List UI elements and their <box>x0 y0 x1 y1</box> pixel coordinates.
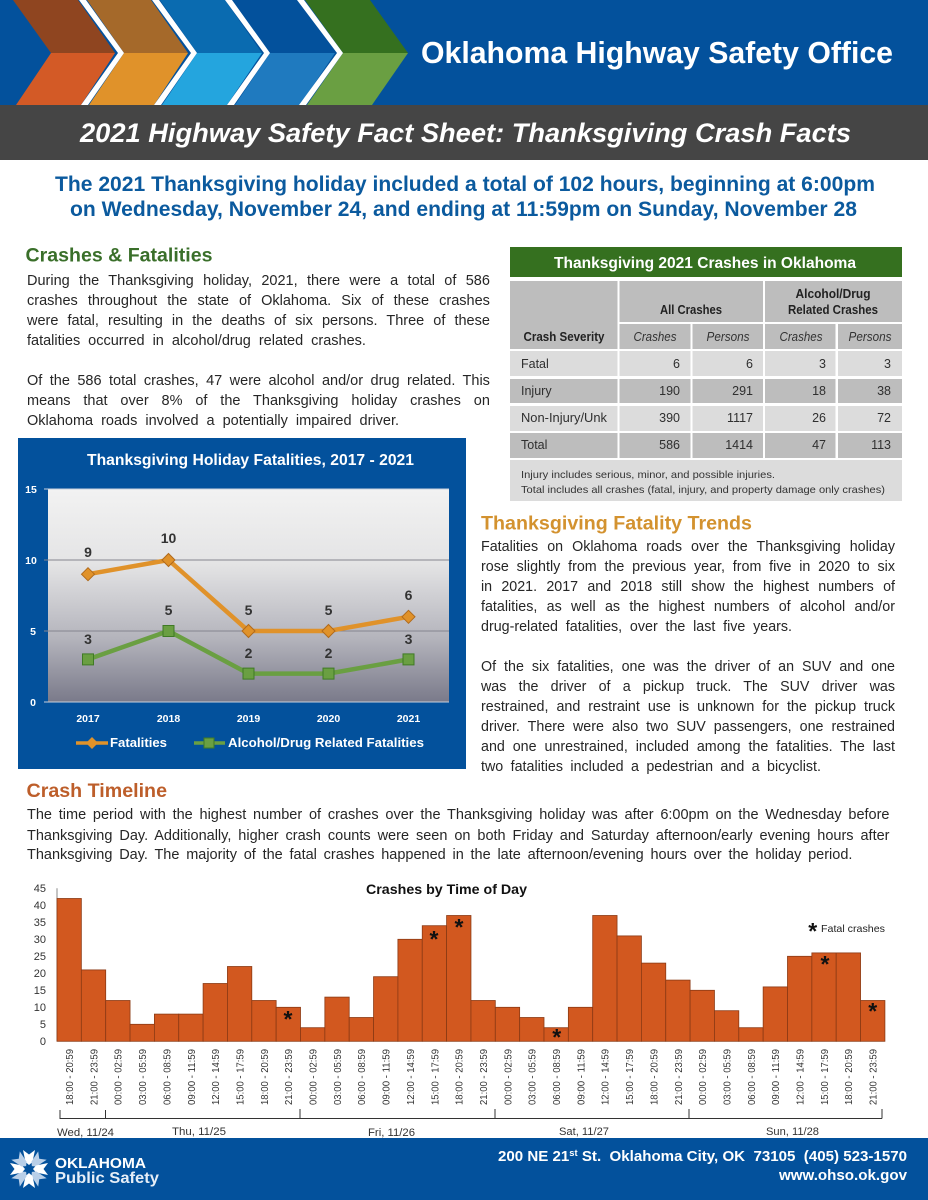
table: Thanksgiving 2021 crashes in Oklahoma: Fatal <box>521 357 549 371</box>
x axis time labels: 15:00 - 17:59 <box>429 1049 441 1105</box>
title bar: 2021 Highway Safety Fact Sheet: Thanksgiving Crash Facts <box>79 118 851 148</box>
y axis: 30 <box>34 934 46 946</box>
y axis <box>34 883 57 1048</box>
chart: Thanksgiving holiday fatalities line chart: 10 <box>161 530 176 546</box>
table: Thanksgiving 2021 crashes in Oklahoma: 291 <box>732 384 753 398</box>
text block: trends narrative: fatalities, as well as the highest numbers of alcohol and/or <box>481 599 895 615</box>
fatal crashes legend <box>808 918 885 944</box>
x axis time labels: 21:00 - 23:59 <box>478 1049 490 1105</box>
table: Thanksgiving 2021 crashes in Oklahoma: 18 <box>812 384 826 398</box>
intro statement <box>55 173 875 221</box>
header banner <box>0 0 928 105</box>
day brackets: Sun, 11/28 <box>766 1126 819 1138</box>
text block: trends narrative: two fatalities included a pedestrian and a bicyclist. <box>481 759 821 775</box>
chart: Thanksgiving holiday fatalities line chart: 3 <box>84 631 92 647</box>
x axis time labels: 00:00 - 02:59 <box>697 1049 709 1105</box>
table: Thanksgiving 2021 crashes in Oklahoma: Injury <box>521 384 552 398</box>
x axis time labels: 03:00 - 05:59 <box>332 1049 344 1105</box>
fatal crash markers: * <box>430 926 439 952</box>
table: Thanksgiving 2021 crashes in Oklahoma: 47 <box>812 438 826 452</box>
text block: timeline narrative: The time period with the highest number of crashes over the Thanksgiving holiday was after 6:00pm on the Wednesday before <box>26 807 889 823</box>
table: Thanksgiving 2021 crashes in Oklahoma: Persons <box>706 330 750 344</box>
fatal crashes legend: Fatal crashes <box>821 923 885 935</box>
table: Thanksgiving 2021 crashes in Oklahoma: 72 <box>877 411 891 425</box>
x axis time labels: 15:00 - 17:59 <box>234 1049 246 1105</box>
table: Thanksgiving 2021 crashes in Oklahoma: Persons <box>848 330 892 344</box>
table: Thanksgiving 2021 crashes in Oklahoma: 190 <box>659 384 680 398</box>
chart: Thanksgiving holiday fatalities line chart: 2 <box>325 645 333 661</box>
table: Thanksgiving 2021 crashes in Oklahoma: 3 <box>884 357 891 371</box>
text block: trends narrative: was the driver of a pickup truck. The SUV driver was <box>481 679 895 695</box>
table: Thanksgiving 2021 crashes in Oklahoma: Crashes <box>634 330 676 344</box>
chart: Thanksgiving holiday fatalities line chart: 5 <box>165 602 173 618</box>
text block: crash summary: were fatal, resulting in the deaths of six persons. Three of these <box>26 313 489 329</box>
text block: crash summary: crashes throughout the state of Oklahoma. Six of these crashes <box>26 293 489 309</box>
fatal crashes legend: * <box>808 918 817 944</box>
text block: trends narrative: Of the six fatalities, one was the driver of an SUV and one <box>481 659 895 675</box>
chart: Thanksgiving holiday fatalities line chart <box>18 438 466 769</box>
text block: crash summary: During the Thanksgiving holiday, 2021, there were a total of 586 <box>26 273 489 289</box>
x axis time labels: 09:00 - 11:59 <box>575 1049 587 1105</box>
y axis: 10 <box>34 1002 46 1014</box>
x axis time labels: 18:00 - 20:59 <box>843 1049 855 1105</box>
y axis: 20 <box>34 968 46 980</box>
table: Thanksgiving 2021 crashes in Oklahoma: Non-Injury/Unk <box>521 411 608 425</box>
table: Thanksgiving 2021 crashes in Oklahoma: 586 <box>659 438 680 452</box>
x axis time labels: 18:00 - 20:59 <box>648 1049 660 1105</box>
logo wordmark: OKLAHOMA <box>55 1156 147 1172</box>
x axis time labels: 03:00 - 05:59 <box>527 1049 539 1105</box>
heading: crashes and fatalities: Crashes & Fatalities <box>26 244 213 266</box>
text block: crash summary: fatalities occurred in alcohol/drug related crashes. <box>26 333 365 349</box>
x axis time labels: 00:00 - 02:59 <box>308 1049 320 1105</box>
chart: Thanksgiving holiday fatalities line chart: 2018 <box>157 713 180 725</box>
chart: Thanksgiving holiday fatalities line chart: 2 <box>245 645 253 661</box>
text block: trends narrative: drug-related fatalities, over the last five years. <box>481 619 792 635</box>
chart: Thanksgiving holiday fatalities line chart: 6 <box>405 587 413 603</box>
fatal crash markers: * <box>552 1024 561 1050</box>
x axis time labels: 00:00 - 02:59 <box>113 1049 125 1105</box>
text block: crash summary: Of the 586 total crashes, 47 were alcohol and/or drug related. This <box>26 372 489 388</box>
table: Thanksgiving 2021 crashes in Oklahoma: Total <box>521 438 547 452</box>
x axis time labels: 15:00 - 17:59 <box>624 1049 636 1105</box>
title bar <box>0 105 928 160</box>
bars <box>57 898 885 1041</box>
table: Thanksgiving 2021 crashes in Oklahoma: Crash Severity <box>524 330 605 344</box>
chart: Thanksgiving holiday fatalities line chart: 0 <box>30 697 36 709</box>
chart: Thanksgiving holiday fatalities line chart: 9 <box>84 544 92 560</box>
icon: chevrons <box>13 0 408 105</box>
intro statement: The 2021 Thanksgiving holiday included a total of 102 hours, beginning at 6:00pm <box>55 173 875 196</box>
chart legend: Alcohol/Drug Related Fatalities <box>228 735 424 750</box>
x axis time labels: 12:00 - 14:59 <box>210 1049 222 1105</box>
chart legend <box>76 735 424 750</box>
text block: trends narrative: in 2021. 2017 and 2018 still show the highest numbers of <box>481 579 895 595</box>
contact details <box>498 1148 907 1184</box>
fatal crash markers <box>284 914 877 1050</box>
contact details: st <box>569 1148 578 1158</box>
text block: trends narrative: restrained, and restraint use is unknown for the pickup truck <box>481 699 895 715</box>
day brackets: Thu, 11/25 <box>172 1126 226 1138</box>
table: Thanksgiving 2021 crashes in Oklahoma: Alcohol/Drug <box>796 287 870 301</box>
day brackets: Fri, 11/26 <box>368 1127 415 1139</box>
text block: timeline narrative: Thanksgiving Day. The majority of the fatal crashes happened in the late afternoon/evening hours over the holiday period. <box>26 847 852 863</box>
x axis time labels: 18:00 - 20:59 <box>454 1049 466 1105</box>
text block: trends narrative <box>481 539 895 775</box>
text block: trends narrative: Fatalities on Oklahoma roads over the Thanksgiving holiday <box>481 539 895 555</box>
x axis time labels: 06:00 - 08:59 <box>356 1049 368 1105</box>
x axis time labels: 06:00 - 08:59 <box>551 1049 563 1105</box>
table: Thanksgiving 2021 crashes in Oklahoma: Injury includes serious, minor, and possible injuries. <box>521 469 775 481</box>
text block: trends narrative: rose slightly from the previous year, from five in 2020 to six <box>481 559 895 575</box>
x axis time labels: 18:00 - 20:59 <box>259 1049 271 1105</box>
table: Thanksgiving 2021 crashes in Oklahoma: 6 <box>746 357 753 371</box>
x axis time labels: 12:00 - 14:59 <box>794 1049 806 1105</box>
table: Thanksgiving 2021 crashes in Oklahoma: 390 <box>659 411 680 425</box>
x axis time labels: 09:00 - 11:59 <box>186 1049 198 1105</box>
chart: Thanksgiving holiday fatalities line chart: 2021 <box>397 713 420 725</box>
x axis time labels: 12:00 - 14:59 <box>600 1049 612 1105</box>
table: Thanksgiving 2021 crashes in Oklahoma: Related Crashes <box>788 303 878 317</box>
table: Thanksgiving 2021 crashes in Oklahoma: 1414 <box>725 438 753 452</box>
chart: crashes by time of day: Crashes by Time of Day <box>366 881 527 897</box>
heading: fatality trends: Thanksgiving Fatality Trends <box>481 512 752 534</box>
chart: Thanksgiving holiday fatalities line chart: 10 <box>25 555 37 567</box>
y axis: 40 <box>34 900 46 912</box>
contact details: www.ohso.ok.gov <box>778 1168 907 1184</box>
fatal crash markers: * <box>284 1006 293 1032</box>
table: Thanksgiving 2021 crashes in Oklahoma: Total includes all crashes (fatal, injury, and property damage only crashes) <box>521 484 885 496</box>
text block: timeline narrative: Thanksgiving Day. Additionally, higher crash counts were seen on both Friday and Saturday afternoon/early evening hours after <box>26 828 889 844</box>
table: Thanksgiving 2021 crashes in Oklahoma: 26 <box>812 411 826 425</box>
x axis time labels: 06:00 - 08:59 <box>161 1049 173 1105</box>
fatal crash markers: * <box>868 998 877 1024</box>
x axis time labels: 12:00 - 14:59 <box>405 1049 417 1105</box>
x axis time labels: 06:00 - 08:59 <box>746 1049 758 1105</box>
logo wordmark: Public Safety <box>55 1170 159 1187</box>
footer <box>0 1138 928 1200</box>
intro statement: on Wednesday, November 24, and ending at 11:59pm on Sunday, November 28 <box>70 198 857 221</box>
text block: trends narrative: driver. There were also two SUV passengers, one restrained <box>481 719 895 735</box>
table: Thanksgiving 2021 crashes in Oklahoma <box>510 247 902 501</box>
table: Thanksgiving 2021 crashes in Oklahoma: 38 <box>877 384 891 398</box>
chart: Thanksgiving holiday fatalities line chart: 15 <box>25 484 37 496</box>
y axis: 25 <box>34 951 46 963</box>
y axis: 5 <box>40 1019 46 1031</box>
logo wordmark <box>55 1156 159 1187</box>
table: Thanksgiving 2021 crashes in Oklahoma: 6 <box>673 357 680 371</box>
table: Thanksgiving 2021 crashes in Oklahoma: 1117 <box>727 411 753 425</box>
chart: Thanksgiving holiday fatalities line chart: Thanksgiving Holiday Fatalities, 2017 - 2021 <box>87 452 414 469</box>
text block: trends narrative: and one unrestrained, included among the fatalities. The last <box>481 739 895 755</box>
x axis time labels: 18:00 - 20:59 <box>64 1049 76 1105</box>
table: Thanksgiving 2021 crashes in Oklahoma: All Crashes <box>660 303 722 317</box>
text block: crash summary: Oklahoma roads involved a potentially impaired driver. <box>26 413 399 429</box>
x axis time labels: 15:00 - 17:59 <box>819 1049 831 1105</box>
table: Thanksgiving 2021 crashes in Oklahoma: 113 <box>871 438 891 452</box>
chart: crashes by time of day <box>34 881 885 1139</box>
chart: Thanksgiving holiday fatalities line chart: 2017 <box>76 713 100 725</box>
heading: crash timeline: Crash Timeline <box>26 780 167 802</box>
chart: Thanksgiving holiday fatalities line chart: 5 <box>325 602 333 618</box>
contact details: St. Oklahoma City, OK 73105 (405) 523-1570 <box>578 1149 907 1165</box>
table: Thanksgiving 2021 crashes in Oklahoma: Crashes <box>780 330 822 344</box>
x axis time labels: 21:00 - 23:59 <box>283 1049 295 1105</box>
day brackets: Wed, 11/24 <box>57 1127 114 1139</box>
line: fatalities <box>82 554 415 638</box>
day brackets <box>57 1109 882 1139</box>
text block: crash summary: means that over 8% of the Thanksgiving holiday crashes on <box>26 393 489 409</box>
x axis time labels: 21:00 - 23:59 <box>868 1049 880 1105</box>
text block: crash summary <box>26 273 490 429</box>
contact details: 200 NE 21 <box>498 1149 567 1165</box>
chart legend: Fatalities <box>110 735 167 750</box>
chart: Thanksgiving holiday fatalities line chart: 2019 <box>237 713 260 725</box>
x axis time labels: 03:00 - 05:59 <box>721 1049 733 1105</box>
y axis: 45 <box>34 883 46 895</box>
fatal crash markers: * <box>821 951 830 977</box>
agency name: Oklahoma Highway Safety Office <box>421 37 893 70</box>
icon: Oklahoma Public Safety star logo <box>10 1150 48 1188</box>
x axis time labels: 09:00 - 11:59 <box>770 1049 782 1105</box>
chart: Thanksgiving holiday fatalities line chart: 3 <box>405 631 413 647</box>
text block: timeline narrative <box>26 807 890 863</box>
x axis time labels: 09:00 - 11:59 <box>381 1049 393 1105</box>
y axis: 0 <box>40 1036 46 1048</box>
chart: Thanksgiving holiday fatalities line chart: 2020 <box>317 713 340 725</box>
fatal crash markers: * <box>455 914 464 940</box>
table: Thanksgiving 2021 crashes in Oklahoma: 3 <box>819 357 826 371</box>
line: alcohol/drug related fatalities <box>82 626 414 679</box>
x axis time labels: 21:00 - 23:59 <box>673 1049 685 1105</box>
chart: Thanksgiving holiday fatalities line chart: 5 <box>245 602 253 618</box>
y axis: 35 <box>34 917 46 929</box>
table: Thanksgiving 2021 crashes in Oklahoma: Thanksgiving 2021 Crashes in Oklahoma <box>554 255 856 272</box>
x axis time labels <box>64 1049 880 1105</box>
x axis time labels: 21:00 - 23:59 <box>88 1049 100 1105</box>
x axis time labels: 00:00 - 02:59 <box>502 1049 514 1105</box>
chart: Thanksgiving holiday fatalities line chart: 5 <box>30 626 36 638</box>
x axis time labels: 03:00 - 05:59 <box>137 1049 149 1105</box>
day brackets: Sat, 11/27 <box>559 1126 609 1138</box>
y axis: 15 <box>34 985 46 997</box>
